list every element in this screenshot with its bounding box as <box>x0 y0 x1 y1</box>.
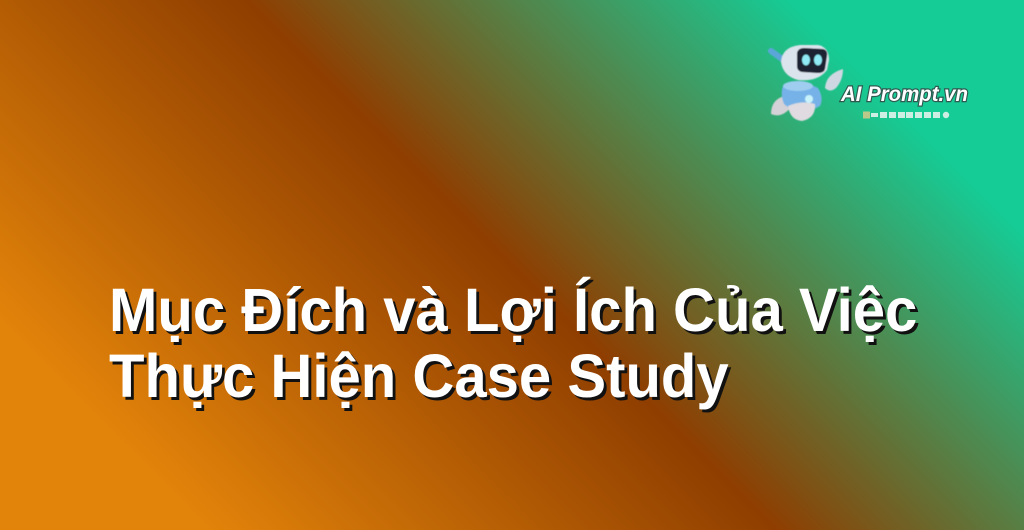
title: Mục Đích và Lợi Ích Của Việc <box>109 276 917 344</box>
icon: robot mascot <box>771 45 843 121</box>
title <box>109 276 918 412</box>
logo: AI Prompt.vn <box>768 44 968 122</box>
logo wordmark: AI Prompt.vn <box>840 83 968 106</box>
title: Thực Hiện Case Study <box>109 342 729 410</box>
logo tagline chips <box>863 112 949 118</box>
